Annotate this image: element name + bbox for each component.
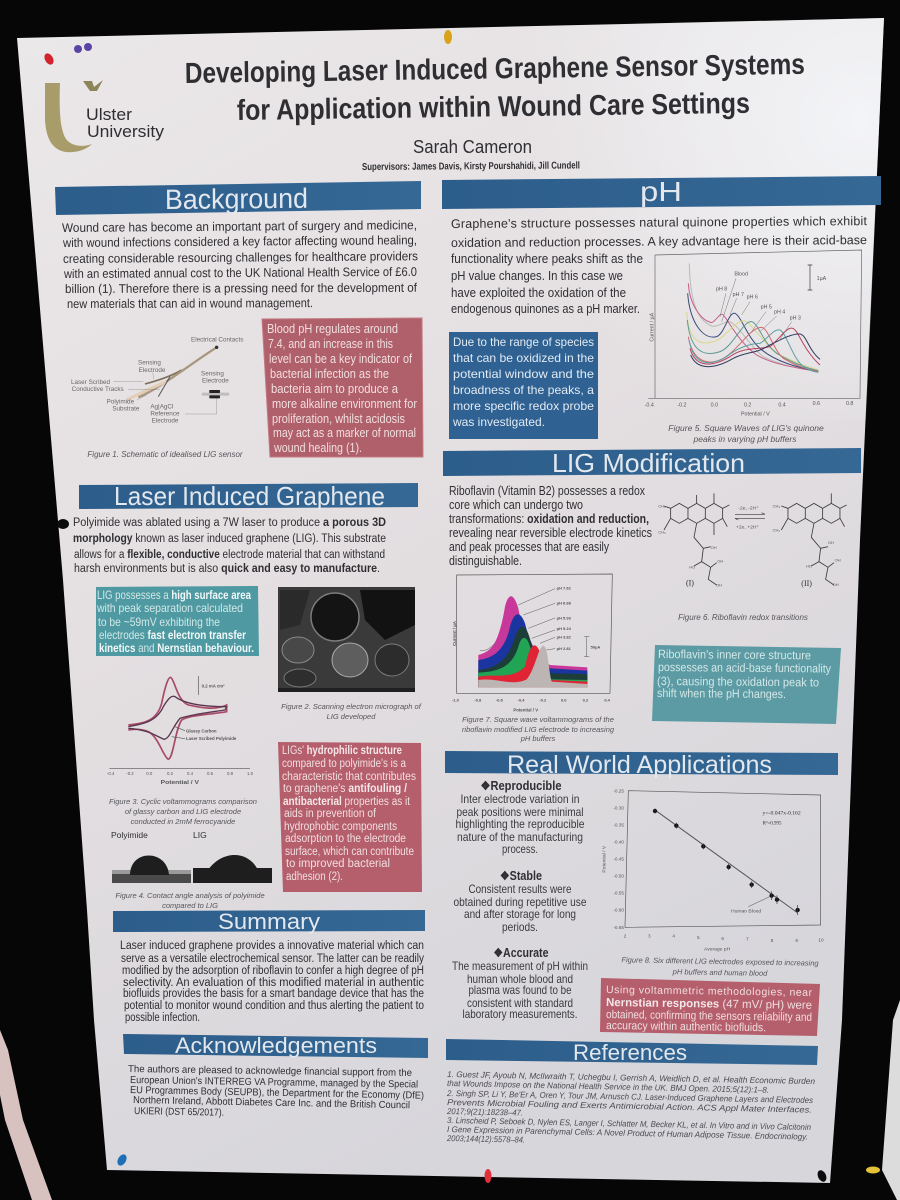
callout: hydrophilic structure: adsorption to the electrode xyxy=(285,833,406,845)
figure 8: calibration plot: R²=0.995 xyxy=(763,820,782,826)
figure 3: cyclic voltammograms: 0.8 xyxy=(227,771,234,776)
figure 8: calibration plot: -0.25 xyxy=(613,788,624,793)
figure 1: LIG sensor schematic: Electrode xyxy=(202,378,229,385)
figure 5: square wave chart: pH 5 xyxy=(761,305,772,311)
figure 6: riboflavin redox transitions: (II) xyxy=(801,579,812,588)
text block: acknowledgements: EU Programmes Body (SEUPB), the Department for the Economy (DfE) xyxy=(130,1085,424,1102)
figure 1: LIG sensor schematic: Electrode xyxy=(152,418,179,425)
text block: stable xyxy=(454,869,587,934)
figure 5 caption: Figure 5. Square Waves of LIG's quinone xyxy=(668,423,824,433)
figure 7 caption: riboflavin modified LIG electrode to increasing xyxy=(462,725,615,734)
figure 8: calibration plot: 2 xyxy=(624,933,627,938)
figure 6: riboflavin redox transitions: OH xyxy=(716,583,722,588)
figure 1 caption: Figure 1. Schematic of idealised LIG sensor xyxy=(87,450,243,459)
figure 2: SEM micrograph xyxy=(278,587,415,692)
callout: hydrophilic structure: antibacterial properties as it xyxy=(283,796,411,808)
figure 8: calibration plot: y=-0.047x-0.162 xyxy=(763,811,801,817)
figure 6: riboflavin redox transitions: OH xyxy=(828,540,834,545)
figure 4: contact angle images xyxy=(111,830,272,883)
figure 6: riboflavin redox transitions: HO xyxy=(806,563,812,568)
text block: LIG method: morphology known as laser induced graphene (LIG). This substrate xyxy=(73,533,386,545)
callout: hydrophilic structure: LIGs' hydrophilic structure xyxy=(282,745,402,757)
text block: LIG method: allows for a flexible, conductive electrode material that can withstand xyxy=(74,549,385,561)
callout: hydrophilic structure: aids in prevention of xyxy=(284,808,377,820)
heading: real world applications xyxy=(445,751,838,779)
callout: high surface area: to be ~59mV exhibiting the xyxy=(98,615,220,629)
figure 1: LIG sensor schematic: Laser Scribed xyxy=(71,379,111,386)
figure 7: square wave voltammograms: 0.0 xyxy=(561,698,567,703)
figure 3: cyclic voltammograms: 0.4 xyxy=(187,771,194,776)
figure 7: square wave voltammograms: pH 3.82 xyxy=(557,635,572,640)
figure 5: square wave chart: pH 6 xyxy=(747,295,758,301)
figure 8: calibration plot: -0.50 xyxy=(613,873,624,878)
figure 7 caption xyxy=(462,715,615,743)
figure 3: cyclic voltammograms: Laser Scribed Polyimide xyxy=(186,736,237,741)
callout: redox probe xyxy=(449,332,598,439)
panel: LIG modification xyxy=(443,448,861,743)
neighbouring poster edge at bottom right xyxy=(882,1000,900,1200)
figure 7: square wave voltammograms: pH 5.93 xyxy=(557,616,572,621)
text block: summary: selectivity. An evaluation of this modified material in authentic xyxy=(123,977,424,989)
heading: pH xyxy=(442,176,881,209)
panel: pH xyxy=(442,176,881,444)
figure 1: LIG sensor schematic: Electrode xyxy=(139,367,166,374)
heading: summary: Summary xyxy=(218,909,320,934)
figure 1: LIG sensor schematic: Substrate xyxy=(112,406,140,413)
figure 6: riboflavin redox transitions: OH xyxy=(711,545,717,550)
callout: blood pH: 7.4, and an increase in this xyxy=(268,337,393,351)
callout: redox probe: that can be oxidized in the xyxy=(453,351,594,365)
text block: accurate: consistent with standard xyxy=(467,996,573,1010)
callout: Nernstian responses xyxy=(600,978,820,1036)
figure 8: calibration plot: -0.35 xyxy=(613,822,624,827)
figure 5: square wave chart: Potential / V xyxy=(741,412,770,418)
figure 5: square wave chart: -0.4 xyxy=(645,403,654,409)
figure 5: square wave chart: pH 3 xyxy=(790,315,801,321)
panel: summary xyxy=(113,909,425,1024)
figure 1: LIG sensor schematic: Reference xyxy=(150,411,180,418)
figure 5 caption xyxy=(668,423,824,444)
text block: acknowledgements: Northern Ireland, Abbott Diabetes Care Inc. and the British Council xyxy=(133,1095,410,1111)
text block: stable: and after storage for long xyxy=(464,907,576,921)
figure 3 caption: of glassy carbon and LIG electrode xyxy=(125,807,241,816)
heading: references xyxy=(446,1039,818,1065)
figure 7: square wave voltammograms: -0.8 xyxy=(474,698,482,703)
figure 3: cyclic voltammograms: Glassy Carbon xyxy=(186,729,217,734)
heading: background: Background xyxy=(165,183,308,215)
panel: laser induced graphene xyxy=(73,481,422,910)
heading: real world applications: Real World Applications xyxy=(507,751,772,779)
text block: accurate xyxy=(452,946,588,1021)
figure 7: square wave voltammograms: -0.6 xyxy=(496,698,504,703)
figure 5 caption: peaks in varying pH buffers xyxy=(692,434,797,444)
text block: reproducible xyxy=(456,779,585,856)
figure 6: riboflavin redox transitions: -2e, -2H⁺ xyxy=(738,505,759,511)
figure 8: calibration plot: 4 xyxy=(672,933,675,938)
logo: Ulster University xyxy=(45,80,165,152)
text block: references: I Gene Expression in Parenchymal Cells: A Novel Product of Human Adipose Tissue. Endocrinology. xyxy=(447,1124,808,1142)
panel: background xyxy=(55,181,423,459)
text block: references: 1. Guest JF, Ayoub N, McIlwraith T, Uchegbu I, Gerrish A, Weidlich D, et al. Health Economic Burden xyxy=(447,1069,815,1086)
figure 7: square wave voltammograms: -1.0 xyxy=(452,698,460,703)
figure 7: square wave voltammograms: 0.2 xyxy=(583,698,589,703)
text block: acknowledgements: UKIERI (DST 65/2017). xyxy=(134,1106,224,1119)
figure 5: square wave chart: Current / µA xyxy=(649,312,655,342)
callout: hydrophilic structure: to graphene's antifouling / xyxy=(283,783,408,795)
text block: riboflavin: Riboflavin (Vitamin B2) possesses a redox xyxy=(449,484,646,498)
text block: summary: modified by the adsorption of riboflavin to confer a high degree of pH xyxy=(122,965,424,977)
callout: hydrophilic structure: characteristic that contributes xyxy=(282,771,416,783)
heading: acknowledgements: Acknowledgements xyxy=(175,1033,377,1058)
figure 6: riboflavin redox transitions: CH₃ xyxy=(658,503,666,508)
figure 4 caption: compared to LIG xyxy=(162,901,218,910)
heading: summary xyxy=(113,909,425,934)
figure 5: square wave chart xyxy=(645,250,862,418)
callout: redox probe: more specific redox probe xyxy=(453,399,594,413)
text block: pH: oxidation and reduction processes. A key advantage here is their acid-base xyxy=(451,233,867,250)
callout: hydrophilic structure: hydrophobic components xyxy=(284,821,397,833)
figure 8: calibration plot: 6 xyxy=(721,936,724,941)
figure 1: LIG sensor schematic: Sensing xyxy=(138,360,161,367)
heading: LIG modification: LIG Modification xyxy=(552,448,745,478)
text block: accurate: laboratory measurements. xyxy=(462,1007,578,1021)
figure 6: riboflavin redox transitions: CH₃ xyxy=(658,529,666,534)
callout: acid-base functionality xyxy=(652,645,841,724)
text block: pH: Graphene's structure possesses natural quinone properties which exhibit xyxy=(451,214,868,231)
panel: real world applications xyxy=(445,751,838,1036)
text block: acknowledgements: The authors are pleased to acknowledge financial support from the xyxy=(128,1064,413,1079)
text block: riboflavin: distinguishable. xyxy=(449,554,522,568)
text block: background xyxy=(62,218,418,311)
figure 5: square wave chart: 1µA xyxy=(817,276,827,282)
figure 7: square wave voltammograms: pH 2.81 xyxy=(557,646,572,651)
panel: acknowledgements xyxy=(123,1033,428,1119)
figure 3 caption: Figure 3. Cyclic voltammograms comparison xyxy=(109,797,257,806)
supervisors: Supervisors: James Davis, Kirsty Pourshahidi, Jill Cundell xyxy=(362,160,580,173)
text block: LIG method xyxy=(73,517,386,575)
figure 5: square wave chart: 0.2 xyxy=(744,403,751,409)
callout: Nernstian responses: accuracy within authentic biofluids. xyxy=(606,1020,766,1034)
logo: Ulster University: University xyxy=(87,122,165,141)
callout: high surface area: LIG possesses a high surface area xyxy=(97,588,251,602)
callout: blood pH xyxy=(262,318,423,457)
figure 8: calibration plot: Average pH xyxy=(704,947,731,953)
figure 5: square wave chart: -0.2 xyxy=(677,403,687,409)
text block: riboflavin: revealing near reversible electrode kinetics xyxy=(449,526,652,540)
text block: references xyxy=(446,1069,815,1145)
text block: summary xyxy=(120,940,424,1024)
figure 5: square wave chart: pH 4 xyxy=(774,309,785,315)
text block: references: that Wounds Impose on the National Health Service in the UK. BMJ Open. 2015;5(12):1–8. xyxy=(447,1078,769,1095)
callout: blood pH: level can be a key indicator of xyxy=(269,352,412,366)
figure 7: square wave voltammograms: pH 5.24 xyxy=(557,626,572,631)
figure 8: calibration plot: -0.55 xyxy=(613,890,624,895)
figure 3: cyclic voltammograms xyxy=(107,676,254,786)
title xyxy=(185,49,805,127)
text block: summary: Laser induced graphene provides a innovative material which can xyxy=(120,940,424,952)
text block: background: new materials that can aid in wound management. xyxy=(67,296,313,311)
figure 8: calibration plot: 8 xyxy=(771,938,774,943)
text block: pH: pH value changes. In this case we xyxy=(451,269,623,283)
figure 8 caption: pH buffers and human blood xyxy=(672,967,768,978)
callout: blood pH: bacteria aim to produce a xyxy=(271,382,398,396)
figure 8: calibration plot: -0.30 xyxy=(613,805,624,810)
text block: background: with wound infections considered a key factor affecting wound healing, xyxy=(62,233,417,250)
figure 2 caption: Figure 2. Scanning electron micrograph of xyxy=(281,702,422,711)
figure 7: square wave voltammograms: 50µA xyxy=(591,645,600,650)
text block: summary: possible infection. xyxy=(125,1012,200,1024)
figure 8: calibration plot xyxy=(601,788,824,953)
text block: acknowledgements xyxy=(128,1064,424,1119)
text block: accurate: The measurement of pH within xyxy=(452,959,588,973)
callout: blood pH: wound healing (1). xyxy=(273,441,362,455)
figure 8: calibration plot: 9 xyxy=(795,938,798,943)
callout: Nernstian responses: Using voltammetric methodologies, near xyxy=(606,984,813,999)
callout: acid-base functionality: shift when the pH changes. xyxy=(657,686,786,701)
heading: background xyxy=(55,181,421,215)
figure 6: riboflavin redox transitions: OH xyxy=(717,559,723,564)
figure 7: square wave voltammograms xyxy=(452,574,612,712)
figure 1: LIG sensor schematic: Sensing xyxy=(201,370,224,377)
figure 7 caption: pH buffers xyxy=(520,734,556,743)
figure 8: calibration plot: -0.60 xyxy=(613,908,624,913)
text block: accurate: plasma was found to be xyxy=(468,983,572,997)
text block: riboflavin: core which can undergo two xyxy=(449,498,583,512)
heading: LIG modification xyxy=(443,448,861,478)
figure 8 caption: Figure 8. Six different LIG electrodes exposed to increasing xyxy=(621,955,820,968)
figure 3: cyclic voltammograms: Potential / V xyxy=(161,780,200,786)
figure 5: square wave chart: 0.0 xyxy=(711,403,718,409)
text block: riboflavin xyxy=(449,484,652,568)
text block: reproducible: ❖Reproducible xyxy=(480,779,562,793)
heading: pH: pH xyxy=(640,176,682,207)
text block: references: 3. Linscheid P, Seboek D, Nylen ES, Langer I, Schlatter M, Becker KL, et al. In Vitro and in Vivo Calcitonin xyxy=(447,1115,811,1132)
text block: accurate: ❖Accurate xyxy=(494,946,549,960)
text block: pH: endogenous quinones as a pH marker. xyxy=(451,302,640,316)
figure 7: square wave voltammograms: -0.2 xyxy=(539,698,547,703)
text block: stable: periods. xyxy=(502,920,538,934)
figure 1: LIG sensor schematic: Polyimide xyxy=(107,399,135,406)
figure 4 caption: Figure 4. Contact angle analysis of polyimide xyxy=(115,891,265,900)
callout: redox probe: potential window and the xyxy=(453,367,594,381)
figure 8 caption xyxy=(621,955,820,978)
text block: LIG method: Polyimide was ablated using a 7W laser to produce a porous 3D xyxy=(73,517,386,529)
callout: blood pH: more alkaline environment for xyxy=(272,397,417,411)
figure 3: cyclic voltammograms: -0.2 xyxy=(126,771,134,776)
figure 3 caption: conducted in 2mM ferrocyanide xyxy=(131,817,235,826)
callout: acid-base functionality: Riboflavin's inner core structure xyxy=(658,647,811,662)
figure 6: riboflavin redox transitions xyxy=(658,493,847,588)
figure 3: cyclic voltammograms: -0.4 xyxy=(107,771,115,776)
text block: pH: functionality where peaks shift as the xyxy=(451,252,643,266)
callout: high surface area: electrodes fast electron transfer xyxy=(99,628,246,642)
callout: Nernstian responses: Nernstian responses (47 mV/ pH) were xyxy=(606,997,812,1012)
text block: accurate: human whole blood and xyxy=(467,972,573,986)
callout: high surface area: kinetics and Nernstian behaviour. xyxy=(99,641,254,655)
heading: laser induced graphene: Laser Induced Graphene xyxy=(114,481,385,511)
callout: hydrophilic structure: adhesion (2). xyxy=(286,871,343,883)
figure 8: calibration plot: Potential / V xyxy=(601,845,607,873)
figure 3: cyclic voltammograms: 0.2 mA cm² xyxy=(202,684,225,689)
text block: summary: biofluids provides the basis for a smart bandage device that has the xyxy=(123,988,424,1000)
figure 6: riboflavin redox transitions: CH₃ xyxy=(773,528,780,533)
text block: references: Prevents Microbial Fouling and Exerts Antimicrobial Action. ACS Appl Mater Interfaces. xyxy=(447,1097,812,1115)
logo: Ulster University: Ulster xyxy=(86,105,132,124)
figure 5: square wave chart: Blood xyxy=(734,271,748,277)
text block: references: 2017;9(21):18238–47. xyxy=(446,1106,523,1118)
text block: LIG method: harsh environments but is also quick and easy to manufacture. xyxy=(74,563,380,575)
text block: reproducible: highlighting the reproducible xyxy=(456,817,585,831)
callout: acid-base functionality: (3), causing the oxidation peak to xyxy=(657,674,819,689)
text block: references: 2. Singh SP, Li Y, Be'Er A, Oren Y, Tour JM, Arnusch CJ. Laser-Induced Graphene Layers and Electrodes xyxy=(446,1088,814,1105)
figure 5: square wave chart: 0.4 xyxy=(778,403,786,409)
text block: background: creating considerable resourcing challenges for healthcare providers xyxy=(63,249,418,266)
figure 7: square wave voltammograms: pH 6.88 xyxy=(557,601,572,606)
figure 6: riboflavin redox transitions: CH₃ xyxy=(773,503,780,508)
figure 8: calibration plot: 5 xyxy=(697,935,700,940)
text block: reproducible: process. xyxy=(502,842,538,856)
text block: background: with an estimated annual cost to the UK National Health Service of £6.0 xyxy=(63,265,417,281)
figure 5: square wave chart: pH 8 xyxy=(716,287,727,293)
callout: acid-base functionality: possesses an acid-base functionality xyxy=(658,660,831,676)
figure 8: calibration plot: -0.45 xyxy=(613,856,624,861)
figure 4: contact angle images: LIG xyxy=(193,830,207,840)
figure 8: calibration plot: 7 xyxy=(746,937,749,942)
figure 7: square wave voltammograms: -0.4 xyxy=(518,698,525,703)
panel: references xyxy=(446,1039,818,1145)
callout: Nernstian responses: obtained, confirming the sensors reliability and xyxy=(606,1009,812,1024)
figure 7: square wave voltammograms: 0.4 xyxy=(604,698,611,703)
figure 8: calibration plot: -0.65 xyxy=(613,925,624,930)
figure 2 caption: LIG developed xyxy=(327,712,376,721)
figure 5: square wave chart: 0.8 xyxy=(846,401,853,407)
callout: hydrophilic structure: compared to polyimide's is a xyxy=(282,758,407,770)
text block: acknowledgements: European Union's INTERREG VA Programme, managed by the Special xyxy=(130,1075,418,1091)
text block: reproducible: Inter electrode variation in xyxy=(460,792,580,806)
figure 8: calibration plot: 3 xyxy=(648,933,651,938)
figure 4 caption xyxy=(115,891,265,910)
paper ribbon at bottom left xyxy=(0,1030,52,1200)
text block: background: billion (1). Therefore there is a pressing need for the development of xyxy=(65,281,417,296)
heading: references: References xyxy=(573,1040,687,1065)
figure 6: riboflavin redox transitions: HO xyxy=(689,564,695,569)
text block: summary: potential to monitor wound condition and thus alerting the patient to xyxy=(124,1000,424,1012)
figure 4: contact angle images: Polyimide xyxy=(111,830,148,840)
figure 5: square wave chart: pH 7 xyxy=(733,292,744,298)
callout: high surface area xyxy=(96,586,259,656)
figure 6 caption: Figure 6. Riboflavin redox transitions xyxy=(678,613,808,622)
figure 2 caption xyxy=(281,702,422,721)
figure 7: square wave voltammograms: pH 7.62 xyxy=(557,586,572,591)
text block: background: Wound care has become an important part of surgery and medicine, xyxy=(62,218,417,235)
callout: hydrophilic structure: to improved bacterial xyxy=(286,858,390,870)
figure 3: cyclic voltammograms: 0.2 xyxy=(167,771,174,776)
text block: stable: Consistent results were xyxy=(468,882,572,896)
callout: blood pH: proliferation, whilst acidosis xyxy=(272,412,405,426)
callout: hydrophilic structure xyxy=(278,742,422,892)
callout: redox probe: Due to the range of species xyxy=(453,335,594,349)
callout: blood pH: Blood pH regulates around xyxy=(267,322,398,336)
text block: pH xyxy=(451,214,868,316)
text block: stable: obtained during repetitive use xyxy=(454,895,587,909)
figure 7: square wave voltammograms: Potential / V xyxy=(513,707,538,712)
figure 1: LIG sensor schematic: Electrical Contacts xyxy=(191,336,243,343)
figure 3 caption xyxy=(109,797,257,826)
heading: acknowledgements xyxy=(123,1033,428,1058)
callout: high surface area: with peak separation calculated xyxy=(96,601,243,615)
figure 6: riboflavin redox transitions: (I) xyxy=(686,578,694,587)
text block: references: 2003;144(12):5578–84. xyxy=(446,1133,525,1145)
figure 3: cyclic voltammograms: 0.6 xyxy=(207,771,214,776)
figure 3: cyclic voltammograms: 1.0 xyxy=(247,771,254,776)
figure 6: riboflavin redox transitions: OH xyxy=(835,558,841,563)
author: Sarah Cameron xyxy=(413,137,532,157)
figure 7: square wave voltammograms: Current / µA xyxy=(452,620,457,646)
text block: stable: ❖Stable xyxy=(500,869,542,883)
text block: reproducible: nature of the manufacturing xyxy=(457,830,583,844)
callout: blood pH: bacterial infection as the xyxy=(270,367,389,381)
figure 8: calibration plot: 10 xyxy=(818,937,824,942)
text block: pH: have exploited the oxidation of the xyxy=(451,286,626,300)
text block: riboflavin: transformations: oxidation and reduction, xyxy=(449,512,649,526)
figure 6: riboflavin redox transitions: OH xyxy=(833,582,839,587)
text block: riboflavin: and peak processes that are easily xyxy=(449,540,610,554)
callout: hydrophilic structure: surface, which can contribute xyxy=(285,846,414,858)
figure 1: LIG sensor schematic: Conductive Tracks xyxy=(72,386,124,393)
figure 7 caption: Figure 7. Square wave voltammograms of the xyxy=(462,715,614,724)
text block: reproducible: peak positions were minimal xyxy=(456,805,584,819)
callout: redox probe: was investigated. xyxy=(452,415,545,429)
figure 8: calibration plot: Human Blood xyxy=(731,909,761,915)
callout: redox probe: broadness of the peaks, a xyxy=(453,383,594,397)
callout: blood pH: may act as a marker of normal xyxy=(273,426,416,440)
figure 6: riboflavin redox transitions: +2e, +2H⁺ xyxy=(736,524,759,530)
figure 1: LIG sensor schematic: Ag|AgCl xyxy=(150,404,173,411)
figure 5: square wave chart: 0.6 xyxy=(813,401,820,407)
figure 8: calibration plot: -0.40 xyxy=(613,839,624,844)
text block: summary: serve as a versatile electrochemical sensor. The latter can be readily xyxy=(121,953,424,965)
title: for Application within Wound Care Settings xyxy=(237,88,750,127)
figure 1: LIG sensor schematic xyxy=(71,336,243,425)
figure 3: cyclic voltammograms: 0.0 xyxy=(146,771,153,776)
